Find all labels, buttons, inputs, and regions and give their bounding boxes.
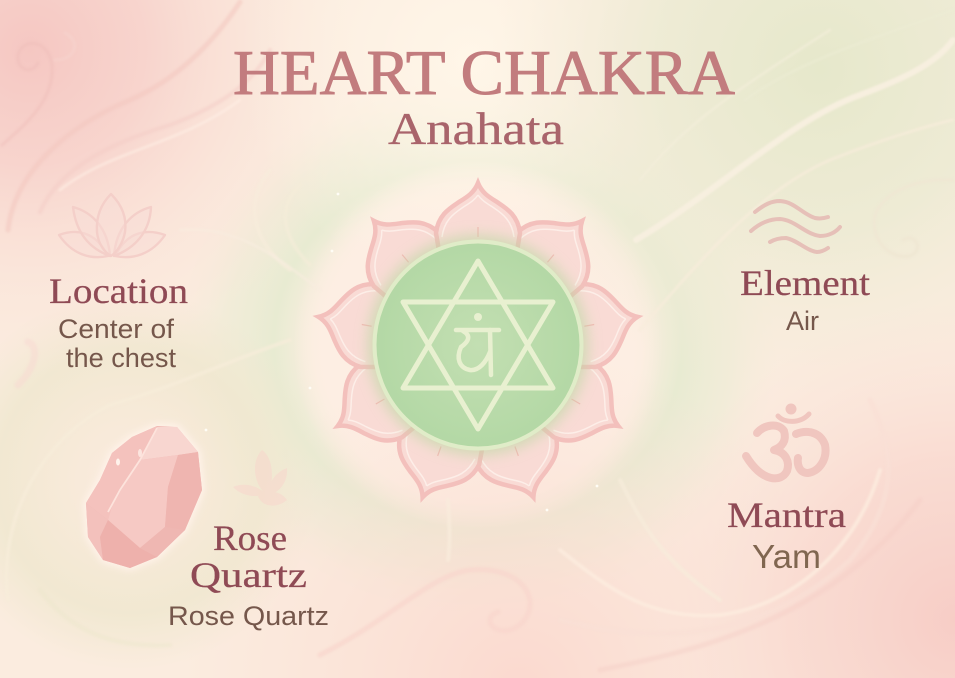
icon: air waves bbox=[751, 201, 840, 252]
icon: small leaf bbox=[233, 450, 287, 506]
label: Location bbox=[49, 271, 188, 311]
green disc bbox=[374, 242, 582, 448]
seed symbol bbox=[456, 313, 499, 375]
panel: mantra bbox=[727, 404, 846, 575]
panel: element bbox=[740, 201, 870, 336]
icon: rose quartz bbox=[86, 426, 202, 568]
value: Center of bbox=[58, 314, 175, 344]
title: HEART CHAKRA bbox=[233, 37, 735, 108]
label: Quartz bbox=[190, 555, 307, 595]
lotus petals bbox=[311, 183, 645, 512]
label: Element bbox=[740, 263, 870, 303]
value: Rose Quartz bbox=[168, 601, 329, 631]
panel: crystal bbox=[86, 426, 329, 631]
value bbox=[58, 314, 176, 373]
icon: lotus bbox=[59, 194, 165, 257]
sparkles bbox=[205, 193, 598, 511]
value: Yam bbox=[752, 538, 821, 575]
value: the chest bbox=[66, 343, 176, 373]
heart chakra mandala bbox=[311, 183, 645, 512]
subtitle: Anahata bbox=[388, 103, 564, 154]
label bbox=[190, 518, 307, 595]
value: Air bbox=[786, 306, 819, 336]
panel: location bbox=[49, 194, 188, 373]
star of two triangles bbox=[403, 261, 553, 429]
icon: om bbox=[746, 404, 826, 478]
label: Rose bbox=[213, 518, 287, 558]
label: Mantra bbox=[727, 495, 846, 535]
